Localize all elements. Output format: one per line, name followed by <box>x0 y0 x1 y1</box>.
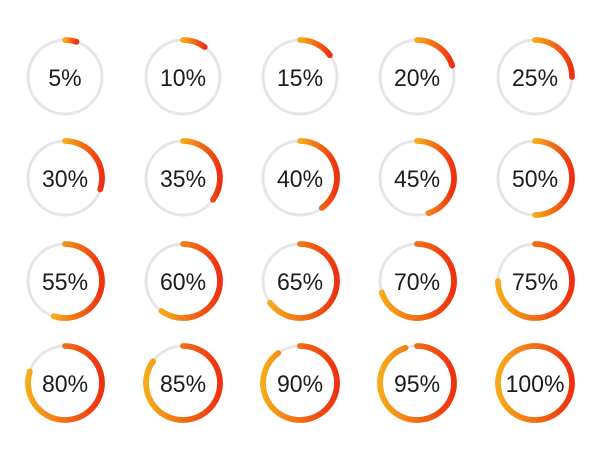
gauge: 35% <box>146 141 220 215</box>
gauge: 10% <box>146 40 220 114</box>
gauge: 45% <box>380 141 454 215</box>
gauge: 35%: 35% <box>160 165 206 193</box>
gauge: 95% <box>380 346 454 420</box>
gauge: 20% <box>380 40 454 114</box>
gauge: 80% <box>28 346 102 420</box>
gauge: 100%: 100% <box>506 370 564 398</box>
gauge: 40%: 40% <box>277 165 323 193</box>
gauge: 10%: 10% <box>160 64 206 92</box>
gauge: 15%: 15% <box>277 64 323 92</box>
gauge: 30%: 30% <box>42 165 88 193</box>
gauge: 70% <box>380 244 454 318</box>
gauge: 50%: 50% <box>512 165 558 193</box>
gauge: 70%: 70% <box>394 268 440 296</box>
gauge: 55%: 55% <box>42 268 88 296</box>
gauge: 85%: 85% <box>160 370 206 398</box>
gauge: 60%: 60% <box>160 268 206 296</box>
gauge: 95%: 95% <box>394 370 440 398</box>
gauge: 15% <box>263 40 337 114</box>
gauge: 65% <box>263 244 337 318</box>
gauge: 90%: 90% <box>277 370 323 398</box>
gauge: 50% <box>498 141 572 215</box>
gauge: 25%: 25% <box>512 64 558 92</box>
gauge: 20%: 20% <box>394 64 440 92</box>
gauge: 75% <box>498 244 572 318</box>
gauge: 65%: 65% <box>277 268 323 296</box>
gauge: 90% <box>263 346 337 420</box>
gauge: 80%: 80% <box>42 370 88 398</box>
gauge: 60% <box>146 244 220 318</box>
gauge: 100% <box>498 346 572 420</box>
gauge: 55% <box>28 244 102 318</box>
gauge: 45%: 45% <box>394 165 440 193</box>
gauge: 40% <box>263 141 337 215</box>
gauge: 75%: 75% <box>512 268 558 296</box>
gauge: 5%: 5% <box>48 64 82 92</box>
gauge: 5% <box>28 40 102 114</box>
gauge: 25% <box>498 40 572 114</box>
gauge: 30% <box>28 141 102 215</box>
gauge: 85% <box>146 346 220 420</box>
